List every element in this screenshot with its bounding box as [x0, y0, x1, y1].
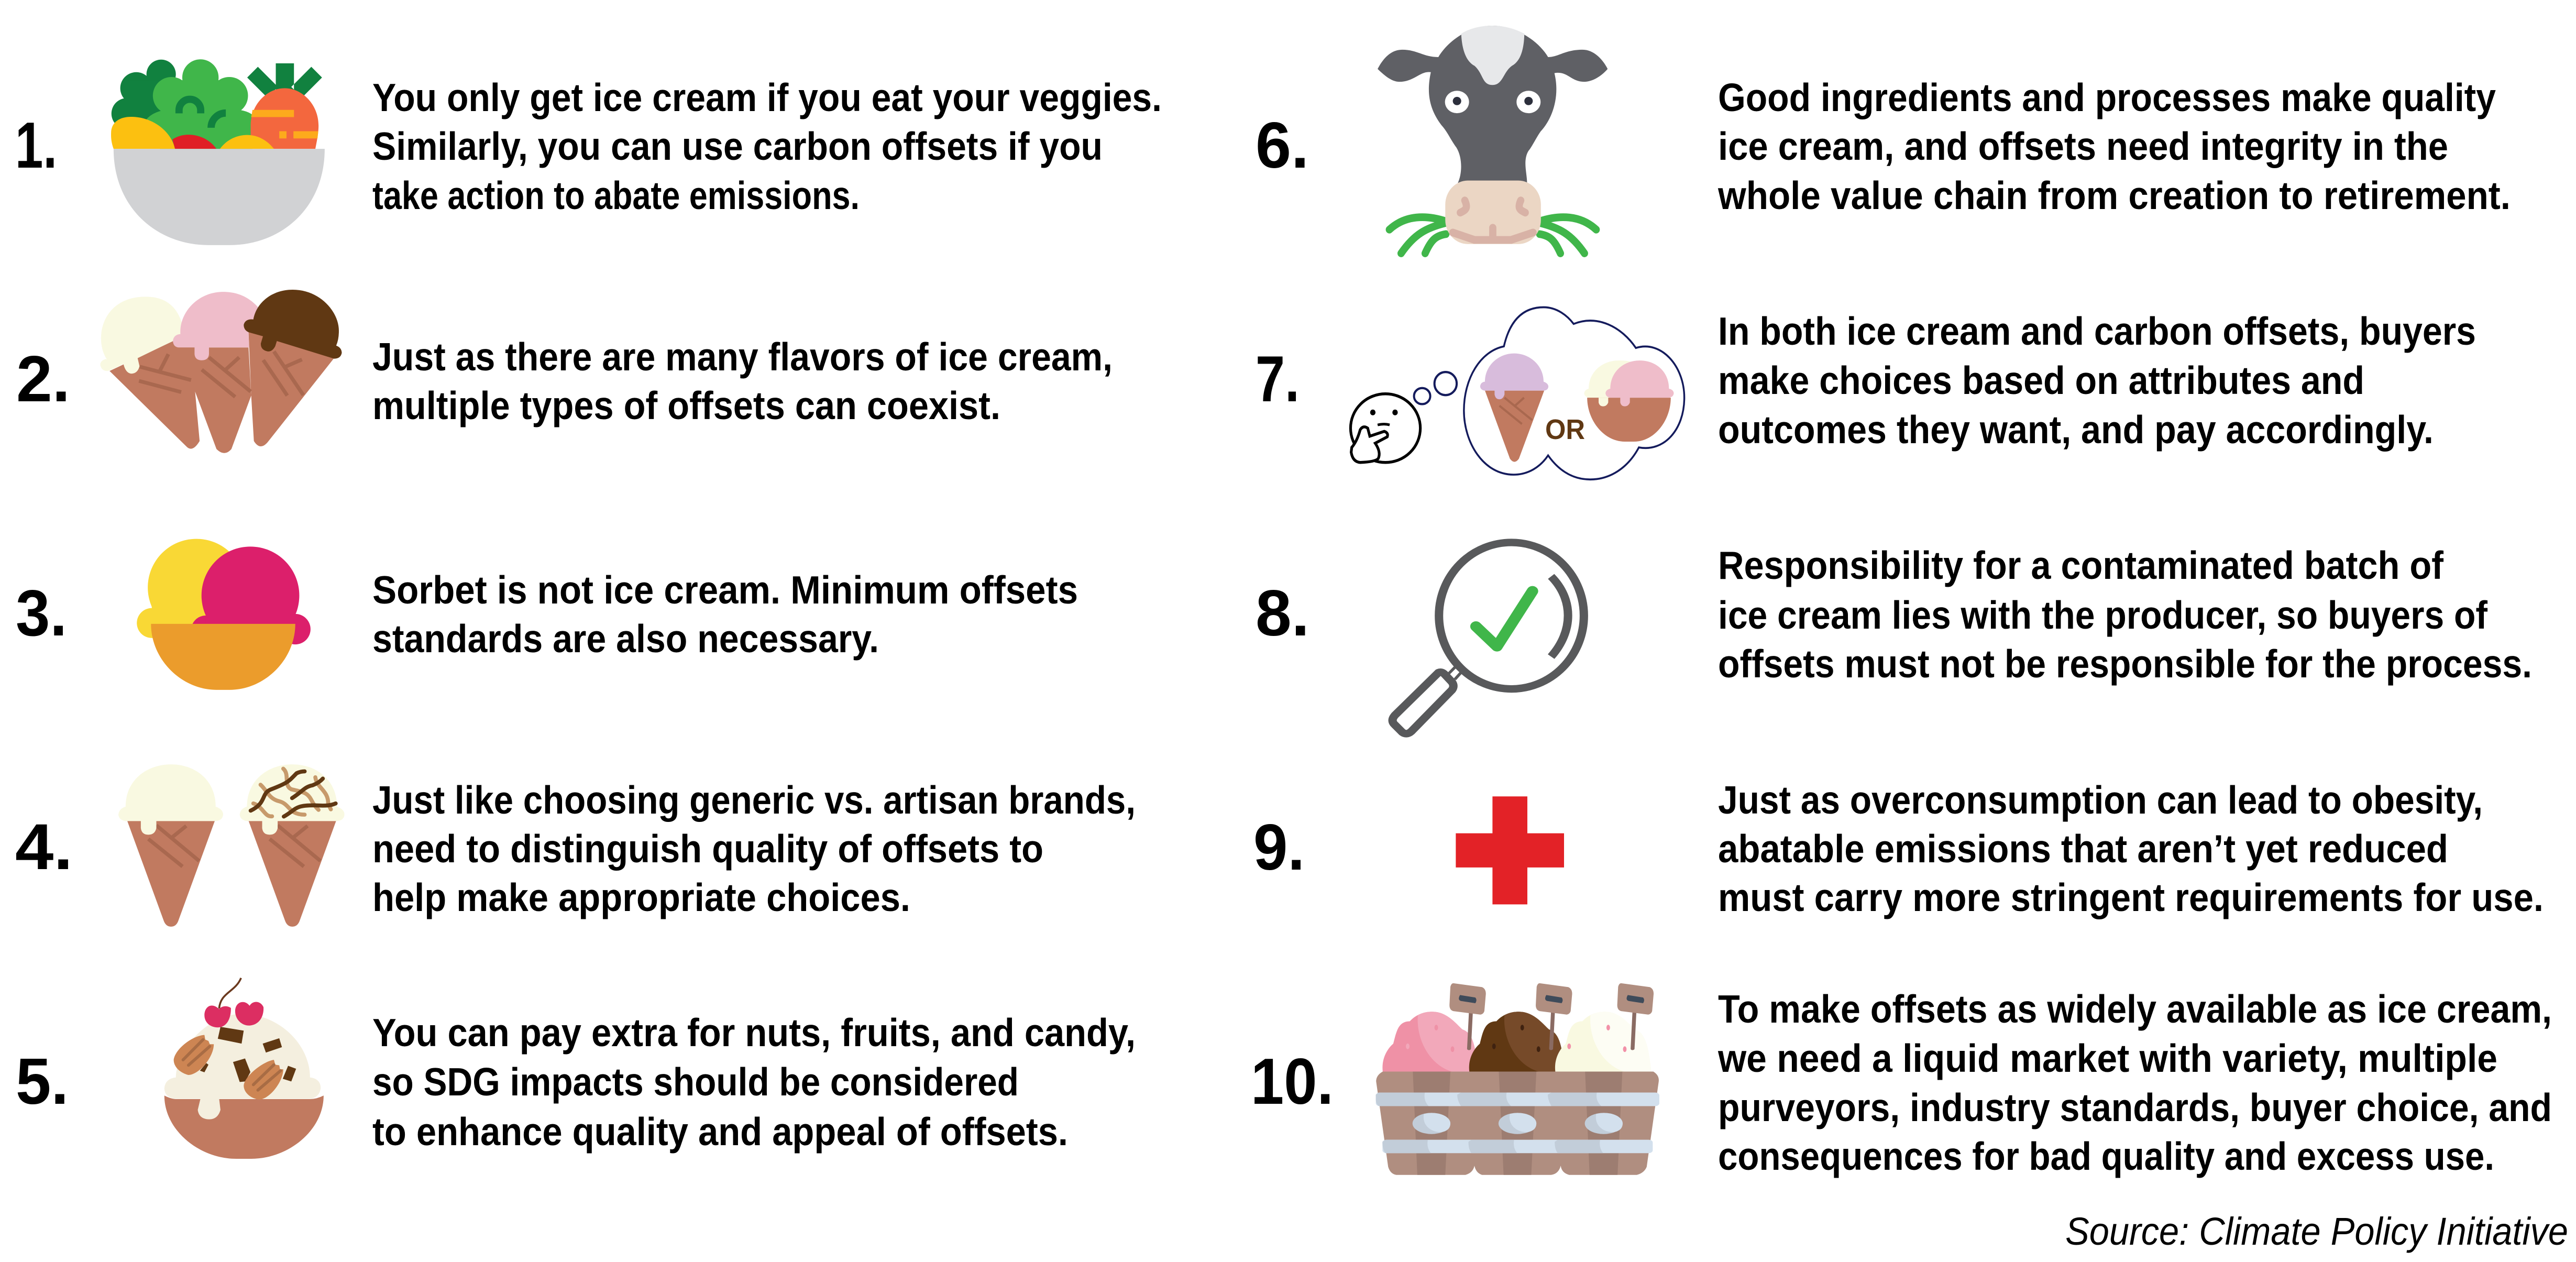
number 4: 4.: [15, 811, 73, 883]
icon: three ice cream cones: [100, 290, 342, 453]
icon: sundae: [164, 978, 324, 1159]
text 8: ice cream lies with the producer, so buyers of: [1718, 593, 2488, 637]
number 7: 7.: [1256, 343, 1300, 415]
text 6: [1718, 75, 2511, 217]
text 7: make choices based on attributes and: [1718, 358, 2364, 402]
icon: red cross: [1456, 796, 1564, 904]
text 6: whole value chain from creation to retirement.: [1718, 173, 2511, 217]
text 2: Just as there are many flavors of ice cream,: [372, 335, 1113, 379]
text 9: Just as overconsumption can lead to obesity,: [1718, 778, 2483, 822]
number 3: 3.: [16, 577, 67, 650]
number 10: 10.: [1251, 1046, 1334, 1118]
icon: sorbet bowl: [137, 539, 311, 690]
text 10: [1718, 987, 2552, 1178]
number 5: 5.: [16, 1046, 69, 1118]
text 7: outcomes they want, and pay accordingly.: [1718, 408, 2434, 452]
text 2: multiple types of offsets can coexist.: [372, 383, 1000, 427]
number 1: 1.: [15, 109, 57, 182]
icon: ice cream tubs: [1376, 983, 1659, 1175]
text 7: In both ice cream and carbon offsets, buyers: [1718, 309, 2476, 353]
text 1: [372, 75, 1162, 217]
icon: thinking face with thought bubble choosing cone or bowl: [1350, 307, 1685, 479]
text 9: abatable emissions that aren’t yet reduced: [1718, 827, 2448, 871]
text 4: Just like choosing generic vs. artisan brands,: [372, 778, 1136, 822]
icon: salad bowl: [111, 59, 325, 245]
text 8: Responsibility for a contaminated batch of: [1718, 543, 2444, 587]
text 8: [1718, 543, 2532, 686]
text 4: help make appropriate choices.: [372, 875, 910, 919]
number 9: 9.: [1253, 811, 1305, 884]
text 3: standards are also necessary.: [372, 617, 879, 661]
text 7: [1718, 309, 2476, 452]
text 5: You can pay extra for nuts, fruits, and candy,: [372, 1011, 1136, 1055]
text 2: [372, 335, 1113, 427]
text 6: ice cream, and offsets need integrity in the: [1718, 124, 2448, 168]
text 9: [1718, 778, 2544, 919]
text 5: [372, 1011, 1136, 1154]
icon: generic and artisan cones: [118, 764, 345, 927]
text 1: Similarly, you can use carbon offsets if you: [372, 124, 1103, 168]
text 10: consequences for bad quality and excess use.: [1718, 1134, 2494, 1178]
number 6: 6.: [1256, 109, 1309, 182]
text 5: so SDG impacts should be considered: [372, 1060, 1019, 1104]
number 8: 8.: [1256, 577, 1309, 650]
text 10: we need a liquid market with variety, multiple: [1718, 1036, 2497, 1080]
text 3: [372, 568, 1078, 661]
text 5: to enhance quality and appeal of offsets.: [372, 1110, 1068, 1154]
text 4: need to distinguish quality of offsets to: [372, 827, 1043, 871]
text 4: [372, 778, 1136, 919]
text 6: Good ingredients and processes make quality: [1718, 75, 2496, 119]
icon: cow: [1378, 26, 1608, 254]
text 1: You only get ice cream if you eat your veggies.: [372, 75, 1162, 119]
text 1: take action to abate emissions.: [372, 173, 860, 217]
icon: thinking face with thought bubble choosing cone or bowl: OR: [1545, 414, 1585, 445]
text 3: Sorbet is not ice cream. Minimum offsets: [372, 568, 1078, 612]
icon: magnifying glass with check mark: [1393, 543, 1584, 733]
number 2: 2.: [16, 343, 70, 415]
